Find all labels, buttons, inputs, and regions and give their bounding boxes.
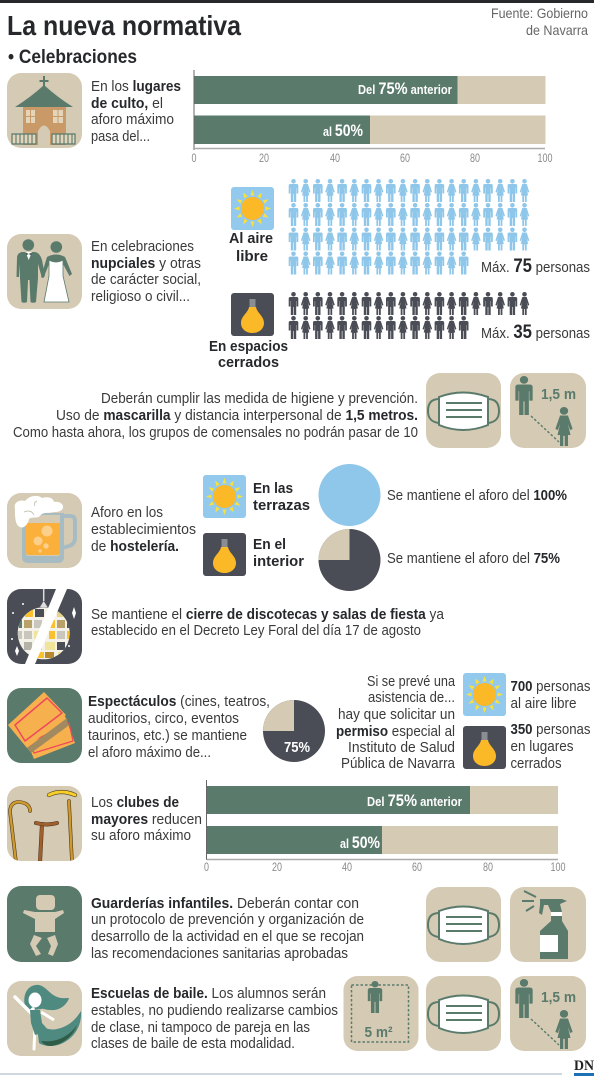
text: nupciales: En celebraciones [91, 238, 194, 255]
text: lugares de culto: En los lugares [91, 78, 181, 95]
text: espectaculos: auditorios, circo, eventos [88, 710, 239, 727]
bar chart: culto: al 50% [323, 121, 363, 140]
label: al aire libre: libre [236, 248, 268, 265]
text: guarderias [91, 895, 364, 962]
panel: discotecas [7, 589, 445, 664]
pictogram: 75 personas [289, 179, 529, 274]
icon: 5 m2: 5 m² [364, 1024, 393, 1041]
text: nupciales [91, 238, 201, 305]
icon: sun [231, 187, 274, 230]
text: escuelas de baile: clases de baile de esta modalidad. [91, 1035, 295, 1052]
text: clubes: Los clubes de [91, 794, 179, 811]
pie: 75% espectaculos: 75% [284, 739, 310, 756]
title: La nueva normativa [7, 10, 241, 41]
text: discotecas: Se mantiene el cierre de discotecas y salas de fiesta ya [91, 606, 445, 623]
label: al aire libre: Al aire [229, 230, 273, 247]
bar chart: culto: 0 [192, 151, 197, 165]
text: lugares de culto [91, 78, 181, 145]
text: guarderias: Guarderías infantiles. Deberán contar con [91, 895, 359, 912]
text: permiso [336, 673, 456, 772]
panel: hosteleria [7, 464, 567, 591]
icon: mask [426, 373, 501, 448]
text: hosteleria: de hostelería. [91, 538, 179, 555]
panel: clubes de mayores [7, 780, 566, 874]
text: espectaculos: taurinos, etc.) se mantiene [88, 727, 247, 744]
icon: 5 m2 [344, 976, 418, 1051]
icon: distance 1,5 m [510, 976, 586, 1051]
pie: 75% [318, 529, 380, 591]
panel: higiene y prevencion [13, 373, 586, 448]
panel: celebraciones nupciales [7, 179, 590, 371]
label: en el interior: interior [253, 553, 304, 570]
label: en las terrazas: En las [253, 480, 293, 497]
label: en espacios cerrados: En espacios [209, 338, 288, 355]
label: al aire libre [229, 230, 273, 265]
bar chart: culto: 100 [538, 151, 553, 165]
text: nupciales: religioso o civil... [91, 288, 190, 305]
text: higiene: Como hasta ahora, los grupos de comensales no podrán pasar de 10 [13, 424, 418, 441]
bar chart: clubes: 60 [412, 860, 422, 874]
label: en las terrazas: terrazas [253, 497, 310, 514]
icon: church [7, 73, 82, 148]
bar chart: clubes: Del 75% anterior [367, 791, 462, 810]
panel: escuelas de baile [7, 976, 586, 1056]
icon: mask [426, 976, 501, 1051]
text: discotecas [91, 606, 445, 639]
footer rule [0, 1074, 562, 1075]
text: permiso: hay que solicitar un [338, 706, 455, 723]
text: clubes: su aforo máximo [91, 827, 191, 844]
bar chart: culto: Del 75% anterior [358, 79, 452, 98]
text: clubes: mayores reducen [91, 811, 202, 828]
label: en espacios cerrados: cerrados [218, 354, 279, 371]
icon: spray bottle [510, 887, 586, 962]
bar chart: culto [192, 70, 553, 165]
text: escuelas de baile: estables, no pudiendo realizarse cambios [91, 1002, 338, 1019]
bar chart: clubes: 80 [483, 860, 493, 874]
text: espectaculos: el aforo máximo de... [88, 744, 211, 761]
text: 350 personas: cerrados [510, 755, 562, 772]
panel: guarderias [7, 886, 586, 962]
bar chart: clubes: 100 [550, 860, 566, 874]
text: permiso: permiso especial al [336, 723, 455, 740]
text: higiene [13, 390, 418, 441]
text: 700 personas [510, 678, 590, 712]
icon: sun 700 [463, 673, 506, 716]
text: permiso: asistencia de... [368, 689, 455, 706]
text: discotecas: establecido en el Decreto Ley Foral del día 17 de agosto [91, 622, 421, 639]
bar chart: culto: 20 [259, 151, 269, 165]
panel: lugares de culto [7, 70, 553, 165]
section heading: • Celebraciones [8, 47, 137, 68]
text: escuelas de baile: Escuelas de baile. Los alumnos serán [91, 985, 326, 1002]
label: en el interior: En el [253, 536, 286, 553]
bar chart: clubes: 40 [342, 860, 352, 874]
text: hosteleria: establecimientos [91, 521, 196, 538]
icon: sun terrazas [203, 475, 246, 518]
text: 700 personas: al aire libre [510, 695, 576, 712]
text: aforo 100: Se mantiene el aforo del 100% [387, 487, 567, 504]
bar chart: culto: 80 [470, 151, 480, 165]
text: guarderias: un protocolo de prevención y organización de [91, 911, 364, 928]
text: 350 personas: en lugares [510, 738, 574, 755]
text: permiso: Si se prevé una [367, 673, 456, 690]
pie: 100% [318, 464, 380, 526]
text: aforo 75: Se mantiene el aforo del 75% [387, 550, 560, 567]
icon: bulb 350 [463, 726, 506, 769]
text: nupciales: de carácter social, [91, 271, 201, 288]
icon: bulb interior [203, 533, 246, 576]
bar chart: clubes: al 50% [340, 833, 380, 852]
text: lugares de culto: de culto, el [91, 95, 163, 112]
bar chart: culto: 60 [400, 151, 410, 165]
text: espectaculos [88, 693, 270, 761]
text: lugares de culto: aforo máximo [91, 111, 174, 128]
pie: 75% espectaculos [263, 700, 325, 762]
pictogram: 35 personas [289, 292, 529, 339]
label: en las terrazas [253, 480, 310, 514]
icon: bulb [231, 293, 274, 336]
text: espectaculos: Espectáculos (cines, teatros, [88, 693, 270, 710]
text: clubes [91, 794, 202, 844]
icon: dancer [7, 981, 82, 1056]
bar chart: clubes [204, 780, 566, 874]
text: permiso: Instituto de Salud [348, 739, 455, 756]
icon: couple [7, 234, 82, 309]
text: hosteleria: Aforo en los [91, 504, 163, 521]
source note: de Navarra [526, 22, 588, 38]
bar chart: clubes: 0 [204, 860, 209, 874]
top bar [0, 0, 594, 3]
icon: distance 1,5 m [510, 373, 586, 448]
icon: baby [7, 886, 82, 962]
text: higiene: Uso de mascarilla y distancia interpersonal de 1,5 metros. [56, 407, 418, 424]
icon: beer mug [7, 493, 82, 568]
icon: tickets [7, 688, 82, 763]
text: escuelas de baile [91, 985, 338, 1052]
text: nupciales: nupciales y otras [91, 255, 201, 272]
text: guarderias: desarrollo de la actividad en el que se recojan [91, 928, 364, 945]
text: lugares de culto: pasa del... [91, 128, 150, 145]
bar chart: culto: 40 [330, 151, 340, 165]
icon: disco ball crossed [7, 589, 82, 664]
icon: canes [7, 786, 82, 862]
icon: mask [426, 887, 501, 962]
label: en el interior [253, 536, 304, 570]
panel: espectaculos [7, 673, 590, 772]
source note [491, 5, 588, 38]
label: en espacios cerrados [209, 338, 288, 371]
text: hosteleria [91, 504, 196, 555]
text: 350 personas [510, 721, 590, 772]
text: permiso: Pública de Navarra [341, 755, 456, 772]
text: escuelas de baile: de clase, ni tampoco de pareja en las [91, 1019, 310, 1036]
bar chart: clubes: 20 [272, 860, 282, 874]
text: higiene: Deberán cumplir las medida de higiene y prevención. [101, 390, 418, 407]
text: guarderias: las recomendaciones sanitarias aprobadas [91, 945, 348, 962]
